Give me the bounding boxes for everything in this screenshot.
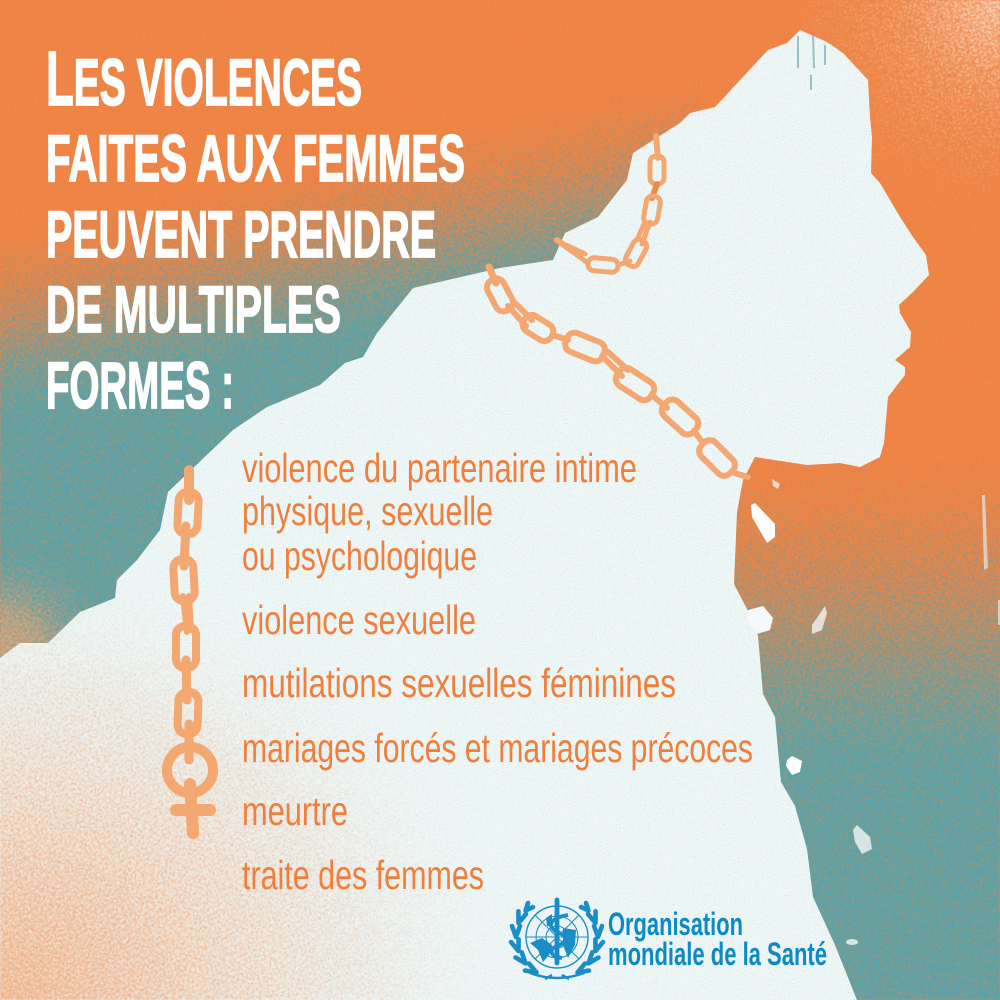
logo: WHO emblem: [511, 900, 603, 979]
rock fragments falling from the silhouette: [748, 479, 1000, 945]
list of forms of violence: meurtre: [242, 788, 348, 834]
list of forms of violence: traite des femmes: [242, 852, 484, 898]
list of forms of violence: ou psychologique: [242, 533, 477, 579]
list of forms of violence: mutilations sexuelles féminines: [242, 660, 676, 706]
title: FORMES :: [46, 348, 234, 422]
title: FAITES AUX FEMMES: [46, 121, 465, 195]
chain across the neck and shoulder: [484, 267, 748, 479]
upper chain from the head: [557, 136, 664, 273]
list of forms of violence: mariages forcés et mariages précoces: [242, 725, 753, 771]
list of forms of violence: violence du partenaire intime: [242, 445, 637, 491]
title: DE MULTIPLES: [46, 272, 341, 346]
list of forms of violence: physique, sexuelle: [242, 488, 493, 534]
logo: organisation name: Organisation: [608, 906, 743, 942]
logo: organisation name: [608, 906, 827, 972]
list of forms of violence: violence sexuelle: [242, 597, 476, 643]
logo: organisation name: mondiale de la Santé: [608, 936, 827, 972]
title: LES VIOLENCES: [46, 36, 362, 122]
vertical chain ending in a female symbol: [167, 470, 213, 833]
title: PEUVENT PRENDRE: [46, 197, 436, 271]
title: [46, 36, 465, 422]
list of forms of violence: [242, 445, 753, 898]
